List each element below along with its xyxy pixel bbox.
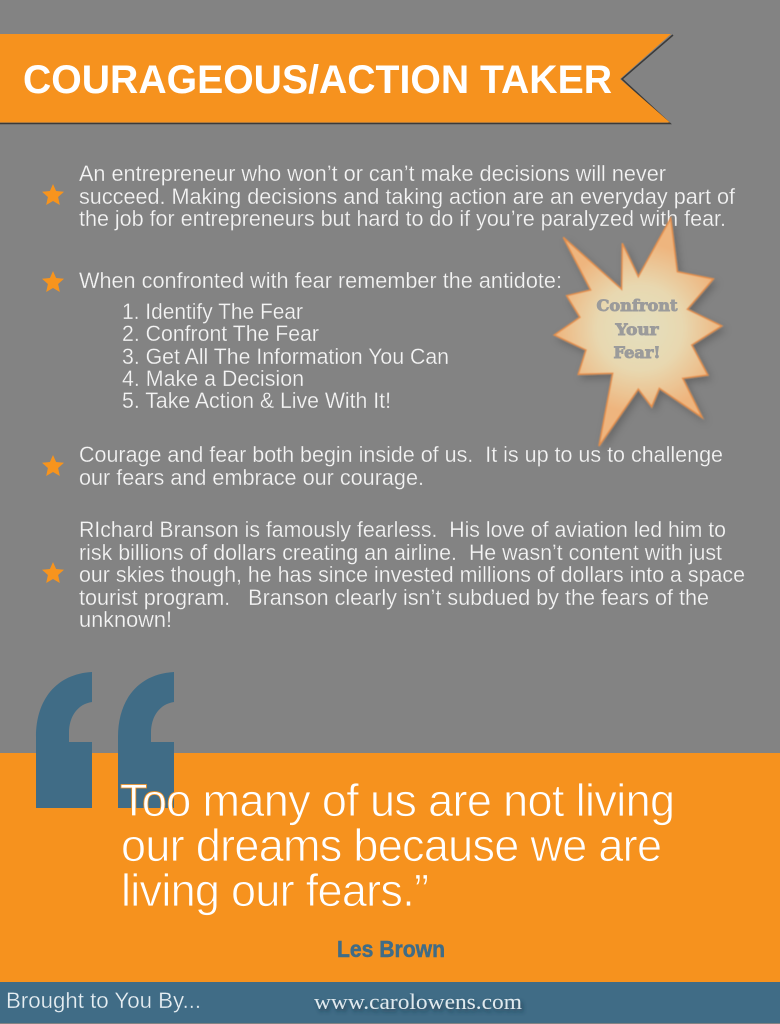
- icon: opening quotation mark: [36, 672, 174, 808]
- footer website: www.carolowens.com: [314, 989, 522, 1014]
- bullet 1 text: the job for entrepreneurs but hard to do if you’re paralyzed with fear.: [79, 206, 726, 231]
- quote text: Too many of us are not living: [120, 775, 675, 826]
- bullet 4 text: unknown!: [79, 607, 172, 632]
- starburst callout: [554, 218, 722, 446]
- bullet 3 text: [79, 442, 723, 490]
- starburst text: Your: [614, 320, 659, 339]
- footer label: Brought to You By...: [6, 988, 201, 1013]
- bullet 1 text: [79, 161, 736, 231]
- bullet 4 text: RIchard Branson is famously fearless. His love of aviation led him to: [79, 517, 726, 542]
- footer bar: [0, 982, 780, 1023]
- starburst text: Fear!: [614, 343, 660, 362]
- quote text: [120, 775, 675, 916]
- title: COURAGEOUS/ACTION TAKER: [23, 58, 612, 102]
- bullet 1 text: succeed. Making decisions and taking action are an everyday part of: [79, 184, 736, 209]
- bullet 4 text: our skies though, he has since invested millions of dollars into a space: [79, 562, 745, 587]
- bullet 4 star icon: [42, 562, 64, 583]
- numbered list: 3. Get All The Information You Can: [122, 344, 449, 369]
- starburst text: [596, 296, 678, 362]
- numbered list: 4. Make a Decision: [122, 366, 304, 391]
- bullet 4 text: risk billions of dollars creating an airline. He wasn’t content with just: [79, 540, 722, 565]
- bullet 4 text: [79, 517, 745, 632]
- bullet 3 text: our fears and embrace our courage.: [79, 465, 424, 490]
- starburst text: Confront: [596, 296, 678, 315]
- numbered list: [122, 299, 449, 413]
- bullet 3 text: Courage and fear both begin inside of us. It is up to us to challenge: [79, 442, 723, 467]
- quote text: living our fears.”: [121, 865, 429, 916]
- quote band: [0, 753, 780, 982]
- bullet 3 star icon: [42, 455, 64, 476]
- numbered list: 1. Identify The Fear: [122, 299, 303, 324]
- quote text: our dreams because we are: [121, 820, 662, 871]
- numbered list: 2. Confront The Fear: [122, 321, 319, 346]
- bullet 4 text: tourist program. Branson clearly isn’t subdued by the fears of the: [79, 585, 709, 610]
- numbered list: 5. Take Action & Live With It!: [122, 388, 391, 413]
- bullet 1 star icon: [42, 184, 64, 205]
- bullet 2 star icon: [42, 271, 64, 292]
- title banner: [0, 34, 673, 124]
- quote attribution: Les Brown: [337, 936, 445, 962]
- bullet 2 text: When confronted with fear remember the antidote:: [79, 268, 562, 293]
- bullet 1 text: An entrepreneur who won’t or can’t make decisions will never: [79, 161, 666, 186]
